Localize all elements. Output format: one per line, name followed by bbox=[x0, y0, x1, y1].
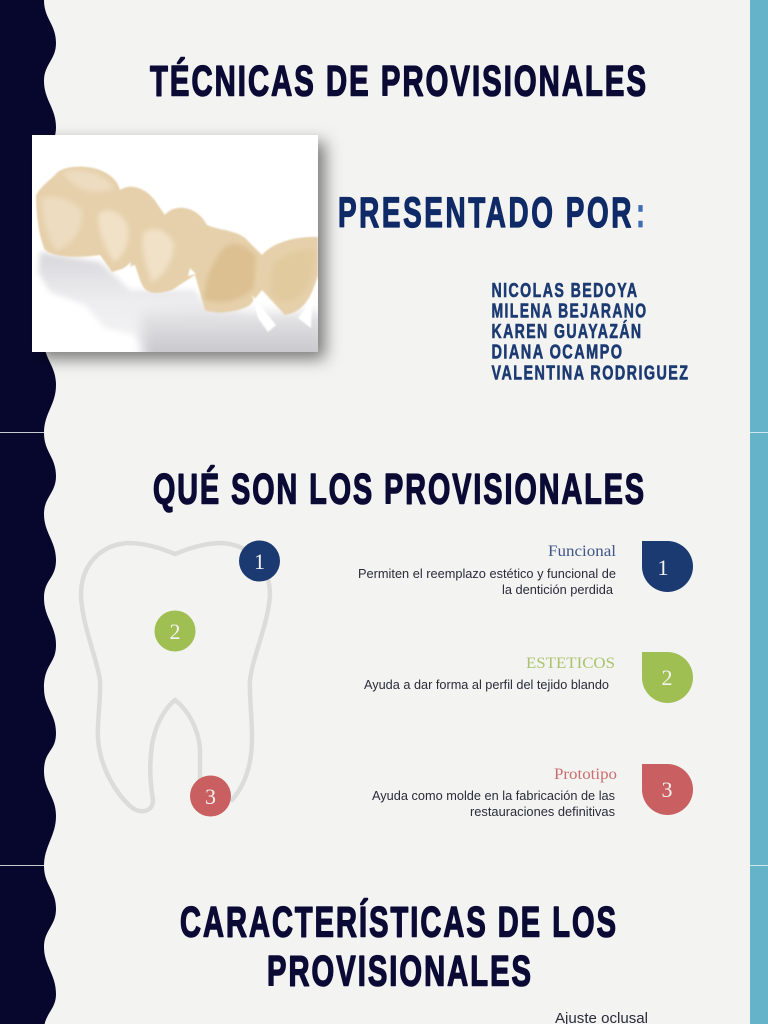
item 2: esteticos: ESTETICOS bbox=[526, 655, 615, 672]
item 2: esteticos: Ayuda a dar forma al perfil del tejido blando bbox=[364, 678, 609, 692]
wavy left band bbox=[0, 0, 56, 1024]
photo: dental provisional bridge bbox=[32, 135, 330, 370]
marker 3 bbox=[190, 776, 231, 816]
item 3: prototipo: restauraciones definitivas bbox=[470, 805, 615, 819]
teal right band bbox=[750, 0, 768, 1024]
silhouette joining the crowns bbox=[36, 167, 318, 315]
item 1: funcional: Funcional bbox=[548, 543, 617, 560]
author names: MILENA BEJARANO bbox=[492, 300, 648, 322]
heading: presentado por: : bbox=[636, 189, 645, 237]
marker 2: 2 bbox=[170, 619, 180, 644]
icon: tooth outline bbox=[81, 543, 270, 811]
marker 1 bbox=[239, 540, 280, 582]
heading: características de los provisionales: PROVISIONALES bbox=[267, 948, 533, 996]
item 3: prototipo: Prototipo bbox=[554, 766, 617, 783]
item 2: esteticos: 2 bbox=[662, 665, 672, 690]
item 1: funcional bbox=[358, 541, 693, 597]
item 2: esteticos bbox=[364, 652, 693, 703]
tooth diagram bbox=[81, 540, 280, 816]
author names: DIANA OCAMPO bbox=[492, 342, 624, 364]
author names: KAREN GUAYAZÁN bbox=[492, 320, 642, 343]
marker 2 bbox=[154, 610, 196, 652]
marker 1: 1 bbox=[254, 549, 265, 574]
marker 3: 3 bbox=[205, 784, 216, 809]
item 3: prototipo: Ayuda como molde en la fabricación de las bbox=[372, 789, 615, 803]
item 1: funcional: Permiten el reemplazo estético y funcional de bbox=[358, 567, 616, 581]
author names: VALENTINA RODRIGUEZ bbox=[492, 362, 690, 384]
heading: características de los provisionales bbox=[180, 898, 618, 996]
author names: NICOLAS BEDOYA bbox=[492, 280, 638, 302]
author names bbox=[492, 280, 690, 384]
item 3: prototipo bbox=[372, 764, 693, 819]
item 1: funcional: 1 bbox=[658, 555, 668, 580]
item 3: prototipo: 3 bbox=[662, 777, 672, 802]
item 1: funcional: la dentición perdida bbox=[502, 583, 613, 597]
